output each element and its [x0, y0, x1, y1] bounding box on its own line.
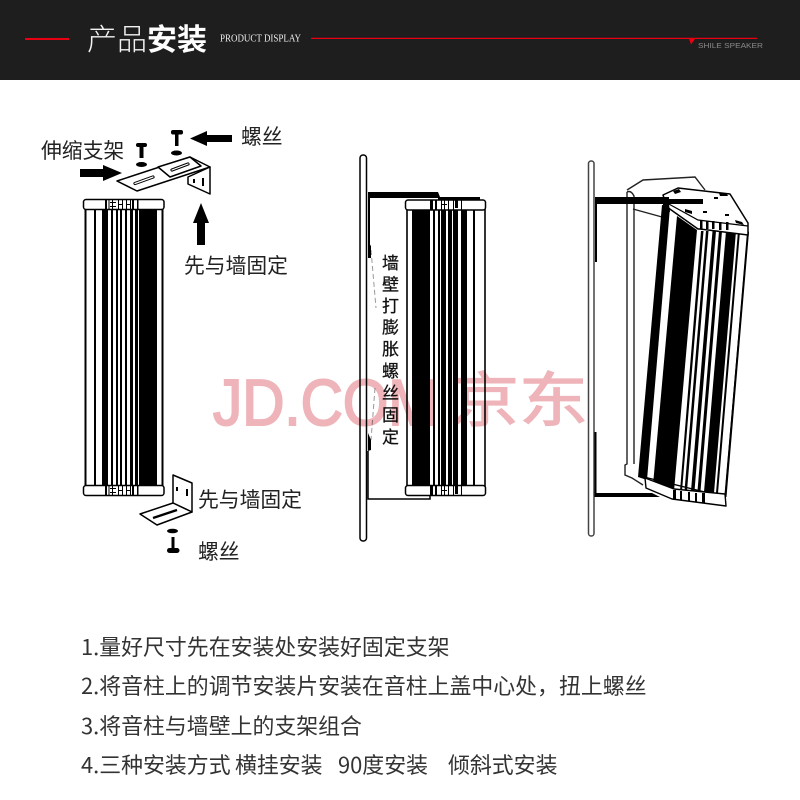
- watermark: JD.COM: [213, 366, 588, 439]
- step 4: 4.三种安装方式: [81, 749, 231, 780]
- icon: top screw left: [136, 143, 147, 167]
- step 3: 3.将音柱与墙壁上的支架组合: [81, 710, 362, 741]
- speaker column: [84, 200, 164, 496]
- watermark: JD.COM: JD.COM: [213, 366, 437, 439]
- speaker column: [406, 200, 486, 496]
- vertical note: 固: [382, 406, 399, 425]
- dashed expansion screw guide: [371, 250, 376, 440]
- vertical note: 打: [382, 297, 399, 316]
- top bracket: [368, 192, 480, 258]
- ghost speaker behind: [625, 177, 705, 485]
- wall: [588, 161, 594, 536]
- label: screw top: 螺丝: [241, 126, 283, 149]
- bottom bracket: [368, 451, 430, 499]
- label: fix to wall bottom: 先与墙固定: [198, 489, 302, 512]
- step 4: 90度安装: [338, 749, 428, 780]
- vertical note: 胀: [382, 340, 399, 359]
- icon: top screw right: [171, 130, 183, 156]
- angled speaker body: [638, 205, 749, 497]
- vertical note: 墙: [382, 254, 399, 273]
- arrow: points up to bracket: [193, 203, 209, 245]
- label: telescopic bracket: 伸缩支架: [41, 140, 124, 163]
- left red accent line: [25, 38, 69, 40]
- label: fix to wall top: 先与墙固定: [184, 255, 288, 278]
- vertical note: 螺: [382, 362, 399, 381]
- subtitle: PRODUCT DISPLAY: [220, 34, 301, 44]
- title: 产品安装: [87, 24, 207, 57]
- step 4: 横挂安装: [235, 749, 323, 780]
- step 2: 2.将音柱上的调节安装片安装在音柱上盖中心处，扭上螺丝: [81, 670, 647, 701]
- icon: lower bracket: [140, 475, 192, 525]
- top arm across cap: [660, 197, 703, 212]
- watermark: JD.COM: 京东: [450, 368, 588, 434]
- vertical note: 膨: [382, 318, 399, 338]
- wall: [360, 155, 366, 541]
- angled bottom cap: [645, 478, 726, 506]
- diagram 1: speaker front with brackets: [41, 126, 302, 564]
- brand tag: SHILE SPEAKER: [698, 41, 764, 50]
- wall plates and lower arm: [594, 197, 665, 497]
- right red line with marker: [311, 38, 757, 44]
- icon: telescopic top bracket: [117, 157, 210, 194]
- bolt ends: [368, 242, 371, 451]
- installation steps: [81, 631, 647, 780]
- vertical note: 壁: [382, 276, 399, 294]
- diagram 2: speaker side-mounted on wall: [360, 155, 486, 541]
- icon: lower screw: [167, 529, 180, 553]
- vertical note: 定: [382, 428, 399, 447]
- label: screw bottom: 螺丝: [198, 541, 240, 564]
- header band: [0, 0, 800, 80]
- arrow: points right to bracket: [80, 165, 122, 181]
- diagram 3: speaker mounted at an angle: [588, 161, 749, 536]
- angled top cap: [663, 188, 748, 235]
- step 4: 倾斜式安装: [448, 749, 558, 780]
- vertical note: 丝: [382, 384, 399, 403]
- arrow: points left to screw: [190, 131, 232, 146]
- step 1: 1.量好尺寸先在安装处安装好固定支架: [81, 631, 450, 662]
